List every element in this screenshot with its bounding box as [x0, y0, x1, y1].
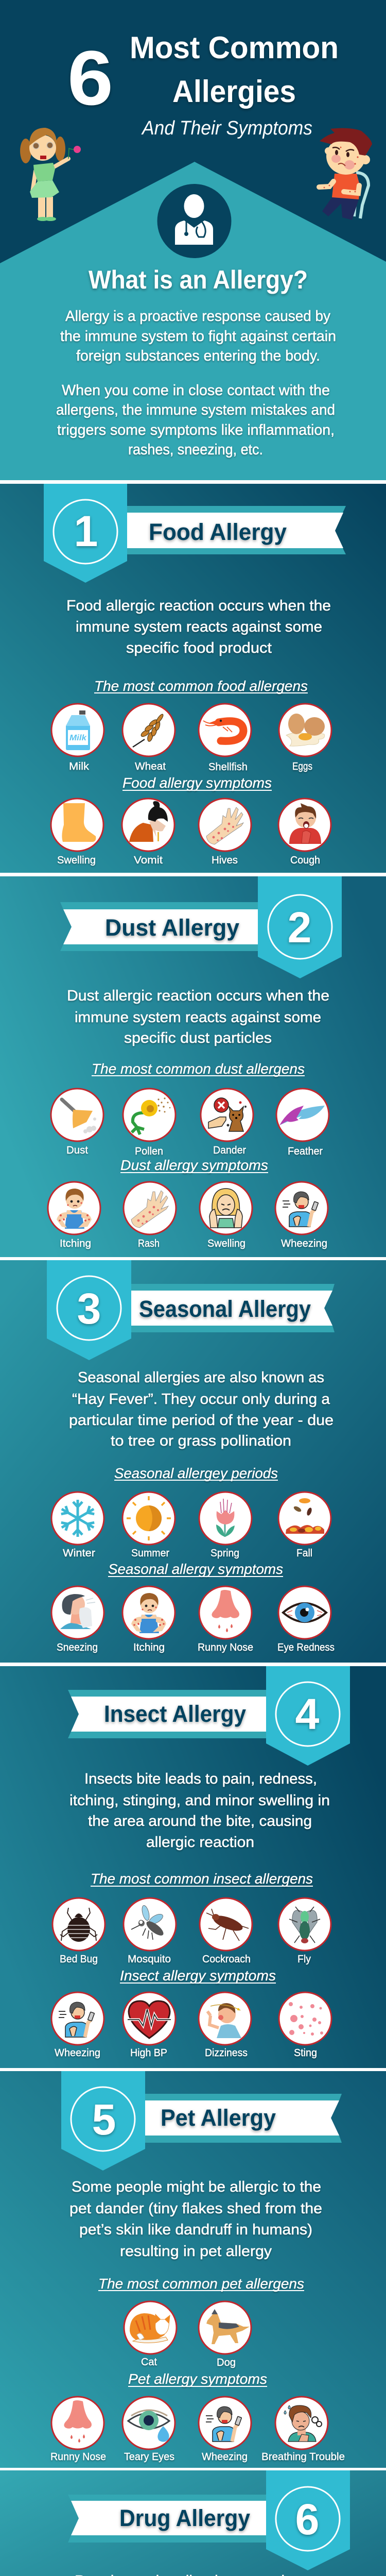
item: itching — [48, 1182, 100, 1249]
heading ribbon: food allergy: 1 — [74, 507, 98, 555]
text block: dust allergy description: specific dust particles — [124, 1030, 272, 1046]
item: mosquito: Mosquito — [128, 1953, 171, 1965]
item: dizziness — [199, 1992, 251, 2059]
item: summer — [122, 1492, 175, 1559]
subheading: seasonal symptoms: Seasonal allergy symptoms — [108, 1561, 283, 1577]
divider — [0, 2068, 386, 2071]
text block: insect allergy description — [69, 1771, 330, 1851]
heading ribbon: drug allergy — [68, 2470, 350, 2570]
item: runny nose — [50, 2397, 106, 2463]
subheading: dust allergens: The most common dust allergens — [92, 1061, 305, 1077]
item: feather: Feather — [288, 1145, 323, 1157]
subheading: pet allergens: The most common pet allergens — [98, 2276, 304, 2292]
item: shellfish: Shellfish — [208, 761, 248, 773]
text block: insect allergy description: Insects bite leads to pain, redness, — [84, 1771, 317, 1787]
text block: contact with allergens: When you come in close contact with the — [62, 382, 330, 399]
item: milk: Milk — [69, 760, 90, 772]
text block: contact with allergens: triggers some symptoms like inflammation, — [57, 422, 335, 438]
panel: insect allergy — [0, 1666, 386, 2068]
item: pollen: Pollen — [135, 1145, 163, 1157]
item: cat: Cat — [141, 2356, 157, 2368]
illustration: girl with flower — [20, 128, 81, 221]
item: cat — [124, 2301, 177, 2368]
text block: pet allergy description: pet dander (tiny flakes shed from the — [69, 2200, 322, 2217]
item: teary eyes: Teary Eyes — [124, 2451, 174, 2463]
item: rash: Rash — [138, 1238, 160, 1249]
item: sting — [279, 1992, 331, 2059]
item: dog — [199, 2301, 251, 2368]
item: winter — [51, 1492, 104, 1559]
subheading: seasonal periods: Seasonal allergey periods — [114, 1465, 278, 1481]
title — [67, 30, 339, 139]
item: teary eyes — [122, 2397, 175, 2463]
item: wheat: Wheat — [135, 760, 166, 772]
text block: seasonal allergy description: “Hay Fever”. They occur only during a — [72, 1391, 330, 1408]
subheading: food allergens: The most common food allergens — [94, 678, 308, 694]
heading ribbon: food allergy: Food Allergy — [149, 519, 287, 545]
panel: pet allergy — [0, 2071, 386, 2468]
heading ribbon: drug allergy: 6 — [295, 2495, 319, 2544]
text block: definition: foreign substances entering the body. — [76, 348, 320, 364]
text block: definition: Allergy is a proactive response caused by — [65, 308, 330, 325]
title: And Their Symptoms — [141, 117, 312, 139]
item: runny nose: Runny Nose — [50, 2451, 106, 2463]
item: sting: Sting — [294, 2047, 317, 2059]
panel: dust allergy — [0, 876, 386, 1257]
title: 6 — [67, 35, 113, 121]
text block: contact with allergens: rashes, sneezing, etc. — [128, 442, 263, 458]
heading: what is an allergy: What is an Allergy? — [89, 265, 308, 294]
text block: food allergy description: Food allergic reaction occurs when the — [66, 598, 331, 614]
item: fall: Fall — [296, 1547, 312, 1559]
item: swelling — [200, 1182, 252, 1249]
heading ribbon: insect allergy — [68, 1666, 350, 1766]
item: hives: Hives — [212, 854, 238, 866]
panel: what is an allergy — [0, 162, 386, 480]
text block: insect allergy description: itching, stinging, and minor swelling in — [69, 1792, 330, 1809]
item: itching — [122, 1586, 175, 1653]
heading ribbon: seasonal allergy: 3 — [77, 1284, 101, 1333]
panel: food allergy — [0, 484, 386, 873]
item: fall — [278, 1492, 331, 1559]
item: wheezing — [51, 1992, 104, 2059]
item: feather — [276, 1089, 329, 1157]
item: dizziness: Dizziness — [205, 2047, 248, 2059]
text block: definition: the immune system to fight against certain — [60, 328, 336, 345]
text block: food allergy description: specific food product — [126, 640, 272, 656]
item: itching: Itching — [133, 1641, 165, 1653]
heading ribbon: insect allergy: 4 — [295, 1690, 320, 1738]
item: dog: Dog — [217, 2357, 236, 2368]
text block: dust allergy description: Dust allergic reaction occurs when the — [67, 988, 329, 1004]
heading ribbon: insect allergy: Insect Allergy — [104, 1701, 246, 1727]
item: swelling: Swelling — [57, 854, 96, 866]
text block: food allergy description: immune system reacts against some — [76, 619, 322, 635]
item: swelling: Swelling — [207, 1238, 245, 1249]
heading ribbon: seasonal allergy — [47, 1260, 335, 1360]
item: swelling — [51, 799, 103, 866]
text block: contact with allergens — [56, 382, 335, 458]
item: cockroach: Cockroach — [202, 1953, 251, 1965]
item: itching: Itching — [60, 1238, 91, 1249]
heading ribbon: seasonal allergy: Seasonal Allergy — [139, 1296, 311, 1322]
panel: drug allergy — [0, 2470, 386, 2576]
text block: contact with allergens: allergens, the immune system mistakes and — [56, 402, 335, 418]
item: rash — [124, 1182, 176, 1249]
heading ribbon: dust allergy: Dust Allergy — [105, 914, 239, 941]
item: summer: Summer — [131, 1547, 169, 1559]
illustration: boy with rash on chair — [319, 128, 372, 220]
item: bed bug — [52, 1898, 105, 1965]
subheading: pet symptoms: Pet allergy symptoms — [128, 2371, 267, 2387]
text block: pet allergy description: pet’s skin like dandruff in humans) — [79, 2222, 312, 2238]
item: breathing trouble — [261, 2397, 345, 2463]
panel: seasonal allergy — [0, 1260, 386, 1663]
divider — [0, 1663, 386, 1666]
item: eye redness: Eye Redness — [277, 1641, 335, 1653]
item: dust: Dust — [66, 1144, 88, 1156]
item: cockroach — [200, 1898, 252, 1965]
text block: food allergy description — [66, 598, 331, 656]
item: vomit: Vomit — [134, 854, 163, 866]
item: wheezing: Wheezing — [281, 1238, 327, 1249]
divider — [0, 480, 386, 484]
item: wheezing: Wheezing — [202, 2451, 248, 2463]
text block: seasonal allergy description: particular time period of the year - due — [69, 1412, 334, 1429]
divider — [0, 1257, 386, 1260]
item: cough: Cough — [290, 854, 320, 866]
item: pollen — [123, 1089, 176, 1157]
text block: pet allergy description: Some people might be allergic to the — [72, 2179, 321, 2195]
item: fly — [278, 1898, 331, 1965]
heading ribbon: pet allergy: Pet Allergy — [161, 2105, 276, 2131]
item: milk — [51, 704, 104, 772]
item: wheezing — [199, 2397, 251, 2463]
item: dust — [51, 1089, 103, 1156]
item: vomit — [122, 799, 174, 866]
item: runny nose: Runny Nose — [198, 1641, 253, 1653]
item: cough — [278, 799, 331, 866]
item: spring: Spring — [210, 1547, 239, 1559]
item: spring — [199, 1492, 252, 1559]
item: eggs: Eggs — [292, 760, 312, 772]
text block: dust allergy description — [67, 988, 329, 1046]
item: eggs — [279, 704, 331, 772]
heading ribbon: pet allergy: 5 — [92, 2095, 116, 2144]
icon: doctor — [157, 184, 232, 258]
text block: pet allergy description: resulting in pet allergy — [120, 2243, 272, 2260]
item: sneezing — [51, 1586, 104, 1653]
heading ribbon: dust allergy: 2 — [288, 903, 311, 952]
text block: dust allergy description: immune system reacts against some — [75, 1009, 321, 1026]
text block: seasonal allergy description: to tree or grass pollination — [111, 1433, 291, 1449]
item: eye redness — [277, 1586, 335, 1653]
subheading: food symptoms: Food allergy symptoms — [122, 775, 272, 791]
item: hives — [199, 799, 251, 866]
item: high bp — [123, 1992, 176, 2059]
item: sneezing: Sneezing — [57, 1641, 98, 1653]
item: milk: Milk — [69, 734, 87, 742]
item: shellfish — [199, 704, 251, 773]
item: breathing trouble: Breathing Trouble — [261, 2451, 345, 2463]
divider — [0, 2468, 386, 2470]
text block: definition — [60, 308, 336, 364]
heading ribbon: food allergy — [44, 484, 346, 583]
divider — [0, 873, 386, 876]
item: wheezing: Wheezing — [55, 2047, 100, 2059]
item: runny nose — [198, 1586, 253, 1653]
heading ribbon: dust allergy — [60, 876, 342, 978]
panel: header background — [0, 0, 386, 480]
item: mosquito — [124, 1898, 176, 1965]
item: dander: Dander — [213, 1144, 246, 1156]
item: high bp: High BP — [130, 2047, 167, 2059]
subheading: insect allergens: The most common insect allergens — [91, 1871, 313, 1887]
item: wheezing — [275, 1182, 328, 1249]
text block: pet allergy description — [69, 2179, 322, 2260]
title: Allergies — [172, 74, 296, 109]
text block: insect allergy description: the area around the bite, causing — [88, 1813, 312, 1829]
text block: insect allergy description: allergic reaction — [146, 1834, 254, 1851]
text block: seasonal allergy description: Seasonal allergies are also known as — [78, 1369, 324, 1386]
text block: seasonal allergy description — [69, 1369, 334, 1449]
subheading: dust symptoms: Dust allergy symptoms — [120, 1157, 268, 1173]
item: winter: Winter — [63, 1547, 95, 1559]
title: Most Common — [130, 30, 339, 65]
item: dander — [201, 1089, 253, 1156]
item: wheat — [122, 704, 175, 772]
item: fly: Fly — [297, 1953, 311, 1965]
subheading: insect symptoms: Insect allergy symptoms — [120, 1968, 276, 1984]
heading ribbon: drug allergy: Drug Allergy — [119, 2505, 250, 2531]
heading ribbon: pet allergy — [61, 2071, 342, 2171]
item: bed bug: Bed Bug — [60, 1953, 98, 1965]
